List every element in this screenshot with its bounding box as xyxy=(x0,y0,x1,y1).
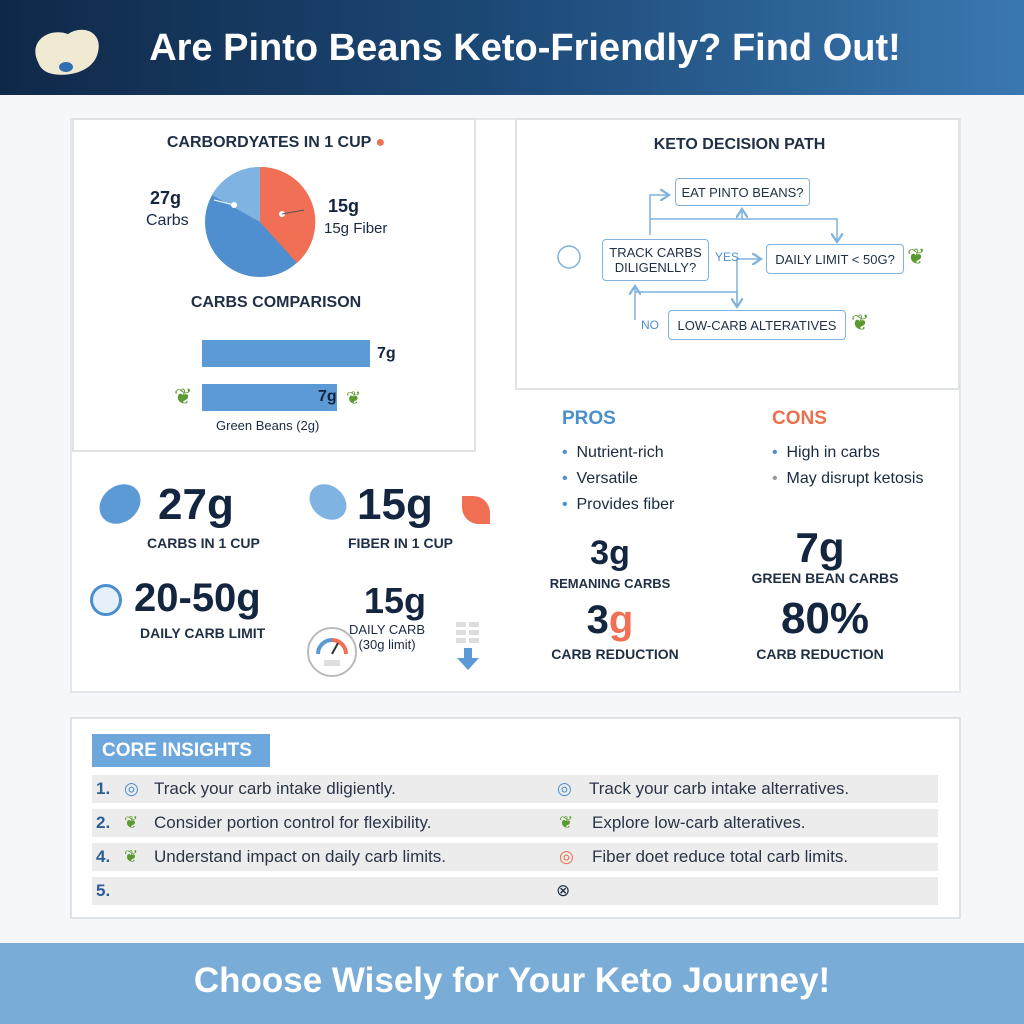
cons: • High in carbs xyxy=(772,444,880,461)
insight rows: ◎ xyxy=(124,779,139,798)
panel: keto decision path: DAILY LIMIT < 50G? xyxy=(775,252,895,266)
insight rows: 1. xyxy=(96,779,110,798)
panel: keto decision path xyxy=(515,118,960,390)
stats: left xyxy=(90,480,490,677)
pros: PROS xyxy=(562,408,616,429)
arrows: flow xyxy=(557,189,843,320)
stats: right: 3g xyxy=(587,598,633,642)
icon: gauge xyxy=(307,627,357,677)
text: Explore low-carb alteratives. xyxy=(592,813,806,832)
text: ⊗ xyxy=(556,881,570,900)
panel: keto decision path: LOW-CARB ALTERATIVES xyxy=(678,318,836,332)
stats: left: DAILY CARB LIMIT xyxy=(140,625,265,641)
pros: • Provides fiber xyxy=(562,496,674,513)
bar chart: ❦ xyxy=(346,388,361,408)
cons: • May disrupt ketosis xyxy=(772,470,923,487)
pie chart xyxy=(205,167,316,277)
cons xyxy=(772,408,923,487)
stats: left: FIBER IN 1 CUP xyxy=(348,535,453,551)
stats: right: 7g xyxy=(795,524,844,571)
text: Fiber doet reduce total carb limits. xyxy=(592,847,848,866)
footer xyxy=(0,943,1024,1024)
panel: keto decision path: ❦ xyxy=(907,244,925,269)
header xyxy=(0,0,1024,95)
icon: stack arrow xyxy=(456,622,479,670)
pros xyxy=(562,408,674,513)
panel: keto decision path: YES xyxy=(715,250,739,264)
panel: carbs chart: 15g Fiber xyxy=(324,220,387,237)
text: 4. xyxy=(96,847,110,866)
panel: keto decision path: TRACK CARBS DILIGENLLY? xyxy=(609,245,702,275)
title: Are Pinto Beans Keto-Friendly? Find Out! xyxy=(149,27,901,69)
pros: • Versatile xyxy=(562,470,638,487)
stats: right: CARB REDUCTION xyxy=(551,646,679,662)
panel: keto decision path: KETO DECISION PATH xyxy=(654,136,825,153)
bar chart: 7g xyxy=(318,388,337,405)
bar chart: 7g xyxy=(377,345,396,362)
stats: left: 15g xyxy=(364,580,426,621)
panel: carbs chart: Carbs xyxy=(146,212,189,229)
cons: CONS xyxy=(772,408,827,429)
insight rows: Track your carb intake dligiently. xyxy=(154,779,396,798)
heading: core insights xyxy=(92,734,270,767)
panel: stats outer xyxy=(70,118,961,693)
text: Understand impact on daily carb limits. xyxy=(154,847,446,866)
text: 2. xyxy=(96,813,110,832)
heading: carbs comparison: CARBS COMPARISON xyxy=(191,294,361,311)
footer: Choose Wisely for Your Keto Journey! xyxy=(194,961,830,1000)
text: ❦ xyxy=(124,813,138,832)
panel: carbs chart: ❦ xyxy=(174,384,192,409)
panel: keto decision path: ❦ xyxy=(851,310,869,335)
panel: keto decision path: EAT PINTO BEANS? xyxy=(681,184,804,200)
heading: carbohydrates: CARBORDYATES IN 1 CUP ● xyxy=(167,134,385,151)
panel: core insights xyxy=(70,717,961,919)
heading: core insights: CORE INSIGHTS xyxy=(102,740,252,761)
stats: left: 20-50g xyxy=(134,576,261,620)
pie labels: 27g xyxy=(150,188,181,208)
stats: left: 27g xyxy=(158,480,234,529)
stats: left: CARBS IN 1 CUP xyxy=(147,535,260,551)
text: Consider portion control for flexibility. xyxy=(154,813,431,832)
stats: left: (30g limit) xyxy=(358,637,416,652)
panel: carbs chart: Green Beans (2g) xyxy=(216,418,319,433)
stats: right xyxy=(550,524,898,662)
insight rows xyxy=(92,775,938,803)
stats: right: REMANING CARBS xyxy=(550,576,670,591)
text: ❦ xyxy=(559,813,573,832)
stats: right: CARB REDUCTION xyxy=(756,646,884,662)
stats: left: 15g xyxy=(357,480,433,529)
stats: right: 80% xyxy=(781,594,869,643)
panel: carbs chart: 15g xyxy=(328,196,359,216)
text: ◎ xyxy=(559,847,574,866)
icon: bean xyxy=(35,30,99,75)
insight rows: Track your carb intake alterratives. xyxy=(589,779,849,798)
insight rows: ◎ xyxy=(557,779,572,798)
panel: carbs chart xyxy=(72,118,476,452)
stats: left: DAILY CARB xyxy=(349,622,425,637)
text: 5. xyxy=(96,881,110,900)
stats: right: GREEN BEAN CARBS xyxy=(751,570,898,586)
bar chart xyxy=(202,340,396,411)
text: ❦ xyxy=(124,847,138,866)
stats: right: 3g xyxy=(590,534,630,572)
pros: • Nutrient-rich xyxy=(562,444,664,461)
panel: keto decision path: NO xyxy=(641,318,659,332)
